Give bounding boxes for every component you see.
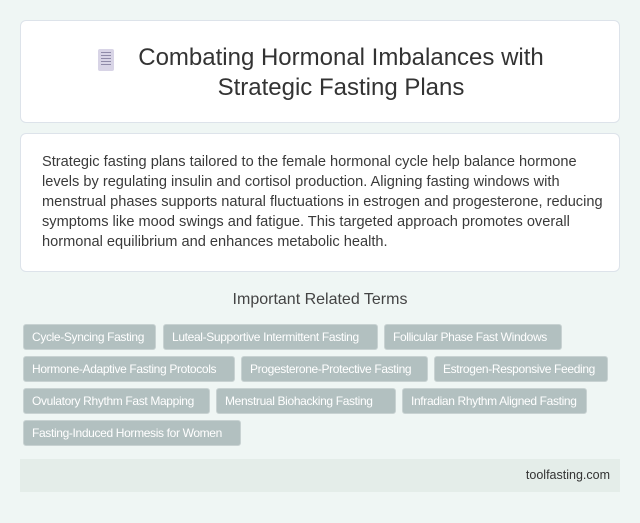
description card	[20, 133, 620, 272]
heading: related terms: Important Related Terms	[233, 291, 407, 308]
tags: Fasting-Induced Hormesis for Women	[32, 426, 222, 440]
description text: levels by regulating insulin and cortisol production. Aligning fasting windows with	[42, 174, 560, 190]
footer	[20, 459, 620, 492]
tags: Menstrual Biohacking Fasting	[225, 394, 373, 408]
tags: Estrogen-Responsive Feeding	[443, 362, 595, 376]
tags: Hormone-Adaptive Fasting Protocols	[32, 362, 216, 376]
icon: document	[98, 49, 114, 71]
description text: menstrual phases supports natural fluctuations in estrogen and progesterone, reducing	[42, 194, 603, 210]
description text	[42, 154, 603, 250]
footer text: toolfasting.com	[526, 468, 610, 482]
tags: Infradian Rhythm Aligned Fasting	[411, 394, 577, 408]
description text: symptoms like mood swings and fatigue. This targeted approach promotes overall	[42, 214, 570, 230]
description text: Strategic fasting plans tailored to the female hormonal cycle help balance hormone	[42, 154, 577, 170]
tags: Progesterone-Protective Fasting	[250, 362, 411, 376]
tags: Follicular Phase Fast Windows	[393, 330, 547, 344]
tags: Cycle-Syncing Fasting	[32, 330, 144, 344]
tags: Luteal-Supportive Intermittent Fasting	[172, 330, 359, 344]
title: Combating Hormonal Imbalances with Strategic Fasting Plans	[138, 44, 544, 101]
description text: hormonal equilibrium and enhances metabolic health.	[42, 234, 388, 250]
header card	[20, 20, 620, 123]
tags: Ovulatory Rhythm Fast Mapping	[32, 394, 194, 408]
